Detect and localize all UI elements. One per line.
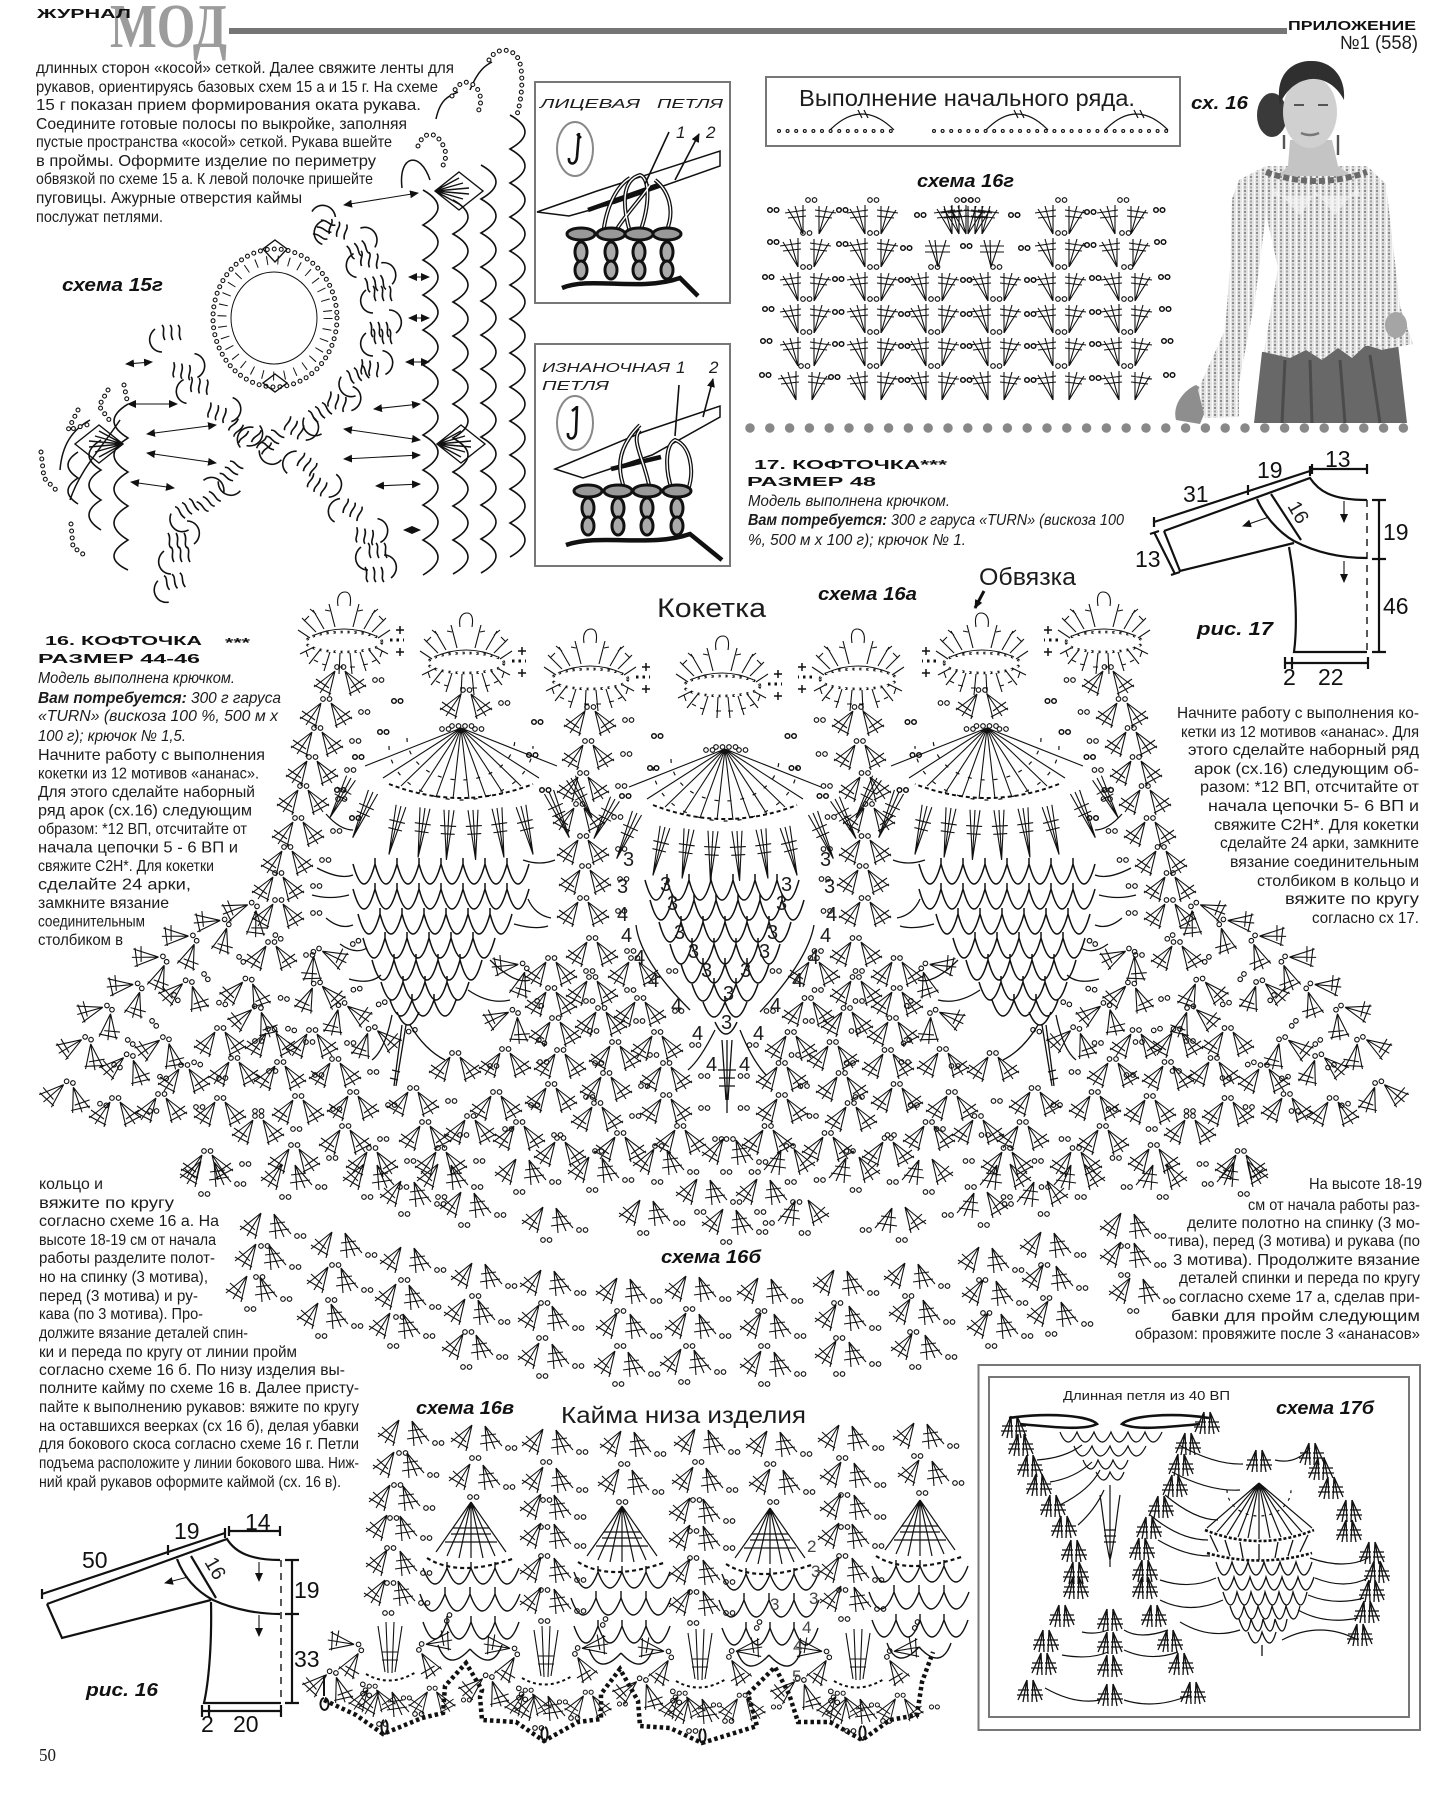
armhole circle (231, 272, 317, 364)
yoke row numbers: 4 (792, 970, 803, 992)
double arrows (126, 193, 429, 530)
text block: model 16 intro (38, 633, 281, 949)
instructions: Для этого сделайте наборный (38, 784, 255, 801)
text block: left column continuation: ний край рукавов оформите каймой (сх. 16 в). (39, 1474, 341, 1491)
yoke row numbers: 3 (660, 874, 671, 896)
dimension 19 top: 19 (1257, 457, 1283, 483)
text block: continuation: 15 г показан прием формирования оката рукава. (36, 97, 421, 114)
instructions: образом: *12 ВП, отсчитайте от (38, 821, 248, 838)
header rule (229, 28, 1287, 34)
text block: continuation: рукавов, ориентируясь базовых схем 15 а и 15 г. На схеме (36, 79, 438, 96)
text block: left column continuation: подъема расположите у линии бокового шва. Ниж- (39, 1455, 359, 1472)
arrow number 2: 2 (708, 358, 719, 377)
yoke row numbers: 3 (820, 849, 831, 871)
materials: Модель выполнена крючком. (38, 670, 235, 687)
instructions: начала цепочки 5 - 6 ВП и (38, 840, 238, 856)
text block: left column continuation: полните кайму по схеме 16 в. Далее присту- (39, 1380, 359, 1397)
yoke row numbers: 3 (688, 941, 699, 963)
yoke row numbers: 3 (776, 893, 787, 915)
text block: right column instructions: арок (сх.16) следующим об- (1194, 761, 1419, 778)
radial stitches around armhole (222, 260, 328, 376)
text block: right column instructions: вяжите по кругу (1285, 891, 1419, 908)
supplement label: ПРИЛОЖЕНИЕ (1288, 18, 1416, 33)
yoke row numbers: 3 (723, 983, 734, 1005)
text block: right column instructions: начала цепочки 5- 6 ВП и (1208, 798, 1419, 815)
text block: right column instructions: свяжите С2Н*. Для кокетки (1214, 817, 1419, 834)
yoke row numbers: 4 (808, 947, 819, 969)
materials line 3: %, 500 м х 100 г); крючок № 1. (748, 532, 966, 549)
chain and arcs (779, 110, 1168, 131)
arrow number 2: 2 (705, 123, 716, 142)
dimension 2: 2 (1283, 664, 1296, 690)
facial features (1294, 104, 1328, 106)
yoke row numbers (617, 849, 837, 1076)
yoke row numbers: 3 (824, 876, 835, 898)
magazine header (35, 0, 1418, 61)
fan rows (364, 1420, 964, 1625)
text block: model 17 (747, 457, 1124, 549)
yoke row numbers: 4 (692, 1023, 703, 1045)
text block: right column instructions: Начните работу с выполнения ко- (1177, 705, 1419, 722)
text block: right column continuation: см от начала работы раз- (1248, 1197, 1420, 1214)
yoke row numbers: 4 (739, 1054, 750, 1076)
dimension 50: 50 (82, 1547, 108, 1573)
panel label word 1: ЛИЦЕВАЯ (538, 96, 640, 111)
rating stars: *** (225, 635, 252, 650)
instructions: ряд арок (сх.16) следующим (38, 802, 252, 820)
panel: purl stitch (535, 344, 730, 566)
yoke row numbers: 4 (617, 904, 628, 926)
dimension 2: 2 (201, 1711, 214, 1737)
text block: right column continuation: На высоте 18-19 (1309, 1176, 1422, 1193)
panel title: Выполнение начального ряда. (799, 85, 1135, 111)
pineapples with nets (420, 1500, 969, 1666)
pattern outline (42, 1526, 299, 1717)
text block: continuation: пустые пространства «косой» сеткой. Рукава вшейте (36, 134, 392, 151)
dimension 13 left: 13 (1135, 546, 1161, 572)
text block: left column continuation: должите вязание деталей спин- (39, 1325, 248, 1342)
diagram: schema 16g (760, 198, 1175, 400)
icon: hook symbol (557, 396, 593, 450)
small fans (1001, 1412, 1390, 1706)
dimension 14: 14 (245, 1509, 271, 1535)
panel label word 2: ПЕТЛЯ (657, 96, 723, 111)
text block: continuation: в проймы. Оформите изделие по периметру (36, 153, 376, 170)
text block: left column continuation (39, 1176, 359, 1491)
text block: right column continuation: согласно схеме 17 а, сделав при- (1179, 1289, 1420, 1306)
pineapple net (353, 858, 529, 1025)
text block: right column continuation: деталей спинки и переда по кругу (1179, 1270, 1420, 1287)
label: рис. 17 (1196, 619, 1274, 639)
small chain pairs (335, 699, 663, 820)
text block: continuation: пуговицы. Ажурные отверстия каймы (36, 190, 302, 207)
left half of yoke (37, 592, 724, 1242)
materials: 100 г); крючок № 1,5. (38, 728, 186, 745)
curl fans (150, 201, 401, 604)
text block: right column instructions: кетки из 12 мотивов «ананас». Для (1181, 724, 1419, 741)
yoke row numbers: 4 (648, 970, 659, 992)
right scallop columns (423, 115, 525, 575)
text block: left column continuation: на оставшихся веерках (сх 16 б), делая убавки (39, 1418, 359, 1435)
neck and chest (1278, 140, 1352, 176)
hem row numbers (770, 1537, 820, 1686)
text block: right column continuation: бавки для пройм следующим (1171, 1308, 1420, 1325)
label: рис. 16 (85, 1680, 159, 1700)
instructions (38, 747, 265, 949)
yoke row numbers: 3 (617, 876, 628, 898)
text block: left column continuation: высоте 18-19 см от начала (39, 1232, 216, 1249)
text block: continuation: Соедините готовые полосы по выкройке, заполняя (36, 116, 407, 133)
label: scheme 16: сх. 16 (1191, 93, 1249, 113)
diagram: schema 16b rows (226, 1213, 1175, 1386)
dimension 33: 33 (294, 1646, 320, 1672)
outer column fans (252, 665, 634, 927)
text block: right column continuation (1135, 1176, 1422, 1343)
text block: right column instructions: согласно сх 17. (1312, 910, 1419, 927)
top scallops and spine (1060, 1432, 1162, 1567)
lower center fans (676, 1139, 802, 1244)
issue number: №1 (558) (1340, 33, 1418, 54)
skirt (1254, 344, 1407, 423)
hair (1279, 61, 1344, 105)
model title: 16. КОФТОЧКА (45, 633, 203, 648)
inner frame (989, 1377, 1409, 1717)
text block: left column continuation: кольцо и (39, 1176, 103, 1193)
instructions: Начните работу с выполнения (38, 747, 265, 764)
text block: left column continuation: согласно схеме 16 б. По низу изделия вы- (39, 1362, 345, 1379)
hem row numbers: 5 (792, 1667, 801, 1686)
long loop label: Длинная петля из 40 ВП (1063, 1388, 1230, 1403)
yoke row numbers: 3 (740, 960, 751, 982)
panel: knit stitch (535, 82, 730, 303)
pattern: figure 16 (42, 1509, 320, 1737)
right hand and sleeve (1360, 184, 1413, 350)
heading: schema 15g: схема 15г (62, 275, 163, 295)
dimension 16: 16 (1283, 498, 1313, 528)
diagram: schema 16a yoke (37, 592, 1411, 1244)
text block: right column continuation: делите полотно на спинку (3 мо- (1187, 1215, 1420, 1232)
text block: left column continuation: кава (по 3 мотива). Про- (39, 1306, 203, 1323)
face (1283, 76, 1337, 148)
hem row numbers: 2 (807, 1537, 816, 1556)
yoke row numbers: 4 (706, 1054, 717, 1076)
long loops (1009, 1415, 1209, 1428)
drapes (1037, 1445, 1368, 1704)
center pineapple (587, 745, 863, 881)
text block: right column instructions: столбиком в кольцо и (1257, 873, 1419, 890)
panel: schema 17b (978, 1365, 1420, 1730)
top ovals (298, 592, 650, 711)
lower yoke fans (37, 888, 724, 1242)
outer frame (978, 1365, 1420, 1730)
yoke row numbers: 4 (621, 925, 632, 947)
instructions: столбиком в (38, 932, 123, 949)
pineapple diamonds (75, 172, 485, 463)
pattern: figure 17 (1135, 446, 1409, 690)
text block: left column continuation: для бокового скоса согласно схеме 16 г. Петли (39, 1436, 359, 1453)
left sleeve (1198, 180, 1266, 418)
panel heading: схема 17б (1276, 1398, 1375, 1418)
yoke row numbers: 3 (674, 922, 685, 944)
panel label line 2: ПЕТЛЯ (542, 378, 609, 393)
earrings (1284, 135, 1338, 155)
top arcs (60, 62, 492, 500)
dimension 20: 20 (233, 1711, 259, 1737)
collar (1266, 172, 1367, 181)
model size: РАЗМЕР 48 (747, 474, 876, 489)
pineapple net (1216, 1562, 1314, 1656)
text block: right column continuation: 3 мотива). Продолжите вязание (1173, 1252, 1420, 1269)
yoke row numbers: 4 (770, 995, 781, 1017)
arrow: edging pointer (975, 591, 984, 608)
text block: continuation: обвязкой по схеме 15 а. К левой полочке пришейте (36, 171, 373, 188)
heading: schema 16g: схема 16г (917, 171, 1014, 191)
heading: schema 16b: схема 16б (661, 1247, 762, 1267)
bottom clusters (300, 1606, 939, 1733)
instructions: соединительным (38, 914, 145, 930)
dimension 19 top: 19 (174, 1518, 200, 1544)
yoke row numbers: 4 (753, 1023, 764, 1045)
yoke row numbers: 4 (820, 925, 831, 947)
pattern outline (1150, 464, 1386, 669)
hem row numbers: 4 (802, 1618, 811, 1637)
separator chain pairs (760, 208, 1175, 382)
materials: Вам потребуется: 300 г гаруса (38, 690, 281, 707)
big pineapple (323, 724, 599, 860)
direction arrows (165, 1562, 259, 1636)
model title: 17. КОФТОЧКА*** (754, 457, 949, 472)
diagram: schema 15g sleeve cap (41, 50, 525, 604)
arrow number 1: 1 (676, 358, 685, 377)
magazine label: ЖУРНАЛ (35, 6, 131, 21)
hair bun (1257, 93, 1287, 137)
text block: right column instructions: этого сделайте наборный ряд (1188, 742, 1420, 759)
dimension 16: 16 (200, 1554, 230, 1584)
illustration: hook and stitches (537, 132, 720, 296)
photo: woman in lace blouse (1175, 61, 1413, 424)
pineapple (1207, 1483, 1312, 1539)
diagram: schema 16v hem (300, 1420, 969, 1743)
text block: continuation: послужат петлями. (36, 209, 163, 226)
chart: schema 17b diagram (1001, 1412, 1390, 1706)
hem row numbers: 3 (770, 1595, 779, 1614)
materials: «TURN» (вискоза 100 %, 500 м х (38, 708, 279, 725)
hem row numbers: 3 (811, 1562, 820, 1581)
text block: right column continuation: образом: провяжите после 3 «ананасов» (1135, 1326, 1420, 1343)
right half of yoke (mirrored) (724, 592, 1411, 1242)
materials (38, 670, 281, 745)
panel frame (766, 77, 1180, 146)
edge end loops (320, 1676, 865, 1743)
small diamonds (263, 240, 287, 392)
text block: right column instructions: разом: *12 ВП, отсчитайте от (1200, 779, 1420, 796)
crocheted bottom edge (324, 1652, 933, 1743)
panel label line 1: ИЗНАНОЧНАЯ (542, 360, 670, 375)
text block: right column instructions: сделайте 24 арки, замкните (1220, 835, 1419, 852)
chain stitches (41, 50, 522, 557)
heading: edging: Обвязка (979, 564, 1077, 591)
heading: schema 16v: схема 16в (416, 1398, 514, 1418)
text block: right column instructions: вязание соединительным (1230, 854, 1419, 871)
hem row numbers: 4 (793, 1637, 802, 1656)
left scallop columns (68, 404, 128, 570)
yoke row numbers: 3 (759, 941, 770, 963)
text block: right column instructions (1177, 705, 1420, 927)
instructions: свяжите С2Н*. Для кокетки (38, 858, 214, 875)
hem row numbers: 3 (809, 1589, 818, 1608)
dotted divider (750, 423, 1405, 433)
text block: left column continuation: перед (3 мотива) и ру- (39, 1288, 198, 1305)
yoke row numbers: 3 (721, 1012, 732, 1034)
blouse body (1239, 166, 1386, 360)
text block: continuation: длинных сторон «косой» сеткой. Далее свяжите ленты для (36, 60, 454, 77)
direction arrows (1243, 501, 1344, 582)
center net (645, 874, 804, 1034)
heading: schema 16a: схема 16а (818, 584, 917, 604)
illustration: hook and stitches (555, 379, 722, 560)
yoke row numbers: 3 (701, 960, 712, 982)
text block: right column continuation: тива), перед (3 мотива) и рукава (по (1168, 1233, 1420, 1250)
yoke row numbers: 4 (826, 904, 837, 926)
left hand (1175, 385, 1212, 424)
panel frame (535, 344, 730, 566)
dimension 19 right: 19 (294, 1577, 320, 1603)
dimension 46: 46 (1383, 593, 1409, 619)
dimension 31: 31 (1183, 481, 1209, 507)
instructions: сделайте 24 арки, (38, 876, 191, 894)
text block: left column continuation: вяжите по кругу (39, 1195, 174, 1212)
text block: left column continuation: ки и переда по кругу от линии пройм (39, 1344, 297, 1361)
text block: continuation (36, 60, 454, 226)
yoke row numbers: 3 (781, 874, 792, 896)
yoke row numbers: 4 (634, 947, 645, 969)
panel: starting row (766, 77, 1180, 146)
yoke row numbers: 4 (671, 995, 682, 1017)
text block: left column continuation: согласно схеме 16 а. На (39, 1213, 219, 1230)
yoke row numbers: 3 (667, 893, 678, 915)
center tail (636, 925, 814, 1113)
text block: left column continuation: но на спинку (3 мотива), (39, 1269, 208, 1286)
yoke row numbers: 3 (623, 849, 634, 871)
instructions: замкните вязание (38, 895, 169, 912)
materials line 2: Вам потребуется: 300 г гаруса «TURN» (вискоза 100 (748, 512, 1124, 529)
dimension 13 top: 13 (1325, 446, 1351, 472)
icon: hook symbol (557, 122, 593, 176)
net tails and drapes (312, 814, 555, 1086)
heading: hem edging: Кайма низа изделия (561, 1402, 806, 1428)
yoke row numbers: 3 (767, 922, 778, 944)
heading: yoke: Кокетка (657, 593, 767, 623)
materials: Модель выполнена крючком. (748, 493, 950, 510)
text block: left column continuation: пайте к выполнению рукавов: вяжите по кругу (39, 1399, 359, 1416)
arrow number 1: 1 (676, 123, 685, 142)
page number: 50 (39, 1745, 56, 1765)
model size: РАЗМЕР 44-46 (38, 651, 200, 666)
instructions: кокетки из 12 мотивов «ананас». (38, 766, 259, 782)
center oval (676, 636, 782, 718)
dimension 19 right: 19 (1383, 519, 1409, 545)
text block: left column continuation: работы разделите полот- (39, 1250, 215, 1267)
panel frame (535, 82, 730, 303)
dimension 22: 22 (1318, 664, 1344, 690)
